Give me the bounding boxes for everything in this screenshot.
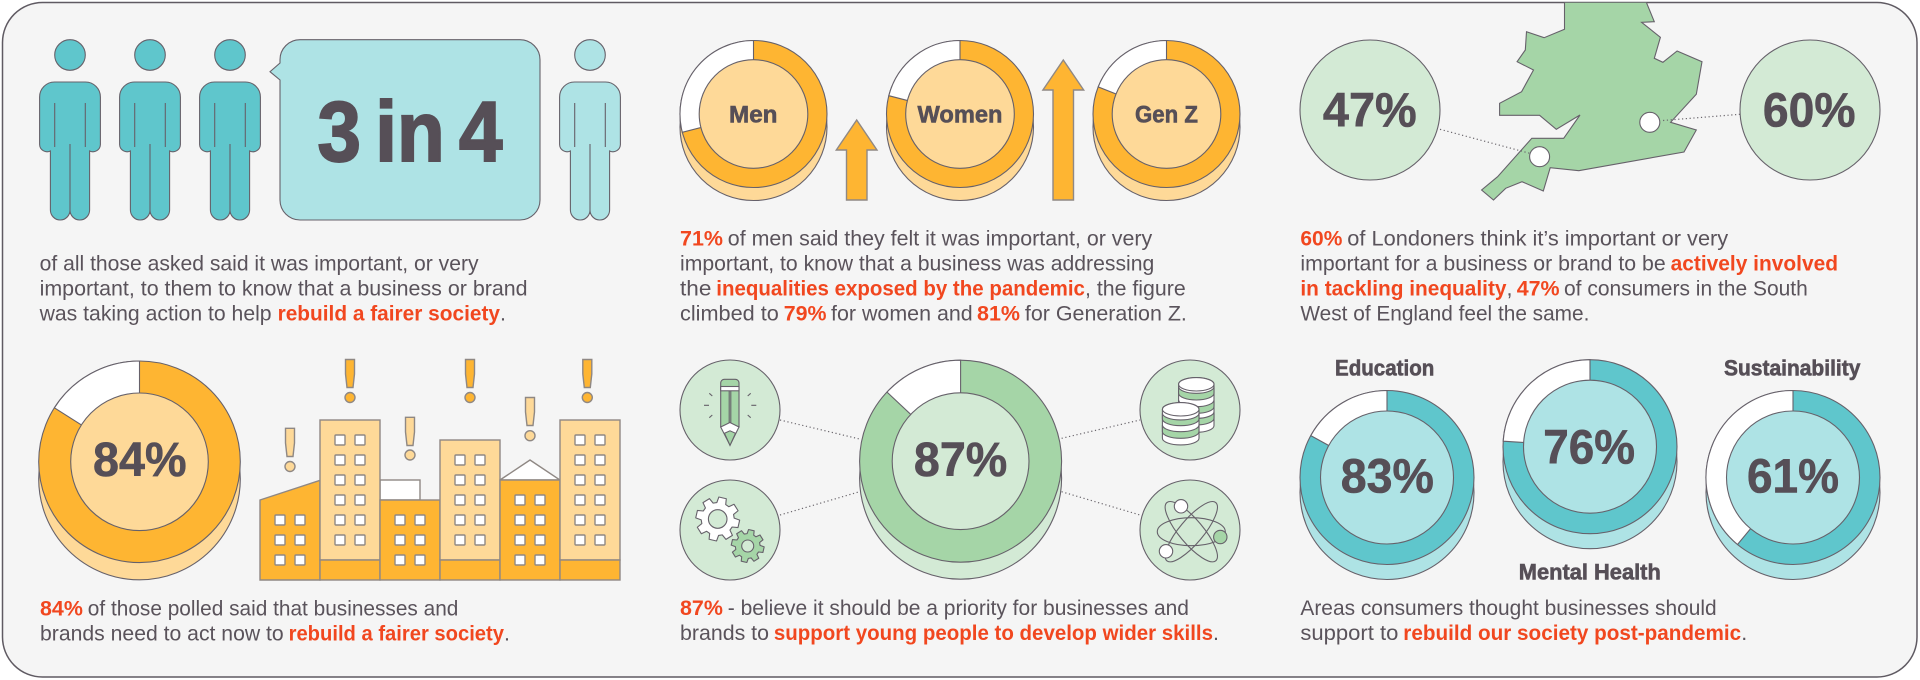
illustration: city buildings bbox=[260, 420, 620, 580]
text block: areas description: . bbox=[1741, 621, 1747, 645]
icon: person 1 bbox=[40, 40, 100, 220]
text block: 87 percent description: 87% bbox=[680, 596, 723, 620]
donut chart: Gen Z 81%: Gen Z bbox=[1135, 101, 1198, 128]
text block: regional description: of Londoners think it’s important or very bbox=[1347, 227, 1728, 251]
text block: 3 in 4 description: important, to them to know that a business or brand bbox=[40, 277, 528, 301]
callout: 3 in 4 speech bubble bbox=[270, 40, 540, 220]
text block: men, women, Gen Z description: climbed to bbox=[680, 302, 779, 326]
donut chart: Women 79% bbox=[886, 40, 1034, 200]
text block: 87 percent description: . bbox=[1213, 621, 1219, 645]
donut chart: Education 83% bbox=[1300, 390, 1474, 580]
text block: regional description: 60% bbox=[1300, 227, 1342, 251]
text block: men, women, Gen Z description: for Generation Z. bbox=[1025, 302, 1187, 326]
text block: areas description bbox=[1300, 596, 1747, 645]
panel: regional map bbox=[1300, 3, 1880, 326]
icon: exclamation marks bbox=[285, 360, 592, 472]
text block: 84 percent description: brands need to act now to bbox=[40, 622, 284, 646]
text block: 3 in 4 description: . bbox=[500, 302, 506, 326]
icon: pencil bbox=[680, 360, 780, 460]
text block: 87 percent description bbox=[680, 596, 1219, 645]
donut chart: Women 79%: Women bbox=[918, 101, 1002, 128]
arrow: tall up bbox=[1043, 60, 1084, 200]
panel: 3 in 4 bbox=[39, 40, 620, 326]
text block: 84 percent description: rebuild a fairer society bbox=[289, 622, 504, 646]
donut chart: Men 71% bbox=[680, 40, 827, 200]
text block: men, women, Gen Z description: inequalities exposed by the pandemic bbox=[716, 277, 1085, 301]
text block: men, women, Gen Z description: , the figure bbox=[1085, 277, 1186, 301]
text block: 84 percent description: . bbox=[504, 622, 510, 646]
text block: regional description: important for a business or brand to be bbox=[1300, 252, 1666, 276]
text block: regional description: , bbox=[1506, 277, 1512, 301]
text block: 3 in 4 description: rebuild a fairer society bbox=[278, 302, 500, 326]
text block: 84 percent description: 84% bbox=[40, 597, 83, 621]
donut chart: Men 71%: Men bbox=[729, 101, 778, 128]
panel: areas to support bbox=[1300, 356, 1880, 645]
icon: coin stacks bbox=[1140, 360, 1240, 460]
stat circle: 60% bbox=[1740, 40, 1880, 180]
stat circle: 47%: 47% bbox=[1323, 85, 1417, 138]
text block: men, women, Gen Z description: the bbox=[680, 277, 711, 301]
marker: South West bbox=[1530, 147, 1550, 167]
text block: men, women, Gen Z description: 79% bbox=[784, 302, 826, 326]
donut chart: 84%: 84% bbox=[93, 434, 186, 487]
label: Education: Education bbox=[1335, 356, 1434, 381]
icon: atom bbox=[1140, 480, 1240, 580]
donut chart: 87% bbox=[860, 360, 1062, 579]
text block: regional description: West of England feel the same. bbox=[1300, 302, 1589, 326]
text block: men, women, Gen Z description: 71% bbox=[680, 227, 723, 251]
text block: men, women, Gen Z description: important, to know that a business was addressing bbox=[680, 252, 1154, 276]
panel: men, women, Gen Z bbox=[680, 40, 1240, 326]
label: Sustainability: Sustainability bbox=[1724, 356, 1861, 381]
donut chart: 84% bbox=[39, 361, 240, 580]
text block: men, women, Gen Z description: of men said they felt it was important, or very bbox=[728, 227, 1152, 251]
text block: 3 in 4 description bbox=[39, 252, 528, 326]
text block: areas description: support to bbox=[1300, 621, 1398, 645]
stat circle: 60%: 60% bbox=[1763, 85, 1856, 138]
text block: men, women, Gen Z description: 81% bbox=[977, 302, 1020, 326]
donut chart: Mental Health 76%: 76% bbox=[1543, 421, 1635, 474]
label: Mental Health: Mental Health bbox=[1519, 559, 1661, 584]
stat circle: 47% bbox=[1300, 40, 1440, 180]
icon: gears bbox=[680, 480, 780, 580]
text block: 84 percent description bbox=[40, 597, 510, 646]
donut chart: Education 83%: 83% bbox=[1341, 451, 1434, 504]
text block: 3 in 4 description: was taking action to help bbox=[39, 302, 272, 326]
text block: regional description: of consumers in the South bbox=[1564, 277, 1808, 301]
text block: regional description: in tackling inequality bbox=[1300, 277, 1507, 301]
text block: areas description: Areas consumers thought businesses should bbox=[1300, 596, 1717, 620]
panel: 84 percent and buildings bbox=[39, 360, 620, 646]
map: southern England bbox=[1482, 3, 1702, 200]
text block: men, women, Gen Z description bbox=[680, 227, 1187, 326]
text block: 87 percent description: support young people to develop wider skills bbox=[774, 621, 1213, 645]
text block: men, women, Gen Z description: for women and bbox=[831, 302, 973, 326]
marker: London bbox=[1640, 112, 1660, 132]
text block: 87 percent description: brands to bbox=[680, 621, 769, 645]
text block: regional description: 47% bbox=[1517, 277, 1560, 301]
icon: person 3 bbox=[200, 40, 260, 220]
text block: 84 percent description: of those polled said that businesses and bbox=[88, 597, 458, 621]
arrow: small up bbox=[836, 120, 877, 200]
donut chart: Mental Health 76% bbox=[1503, 360, 1677, 549]
text block: regional description: actively involved bbox=[1671, 252, 1838, 276]
text block: regional description bbox=[1300, 227, 1838, 326]
text block: 3 in 4 description: of all those asked said it was important, or very bbox=[40, 252, 479, 276]
icon: person 4 (light) bbox=[560, 40, 620, 220]
text block: 87 percent description: - believe it should be a priority for businesses and bbox=[728, 596, 1189, 620]
donut chart: Sustainability 61% bbox=[1706, 390, 1880, 580]
donut chart: Sustainability 61%: 61% bbox=[1747, 451, 1839, 504]
text block: areas description: rebuild our society post-pandemic bbox=[1403, 621, 1741, 645]
donut chart: 87%: 87% bbox=[914, 434, 1007, 487]
donut chart: Gen Z 81% bbox=[1093, 40, 1240, 200]
callout: 3 in 4 speech bubble: 3 in 4 bbox=[318, 85, 502, 180]
icon: person 2 bbox=[120, 40, 180, 220]
panel: 87 percent skills bbox=[680, 360, 1240, 645]
